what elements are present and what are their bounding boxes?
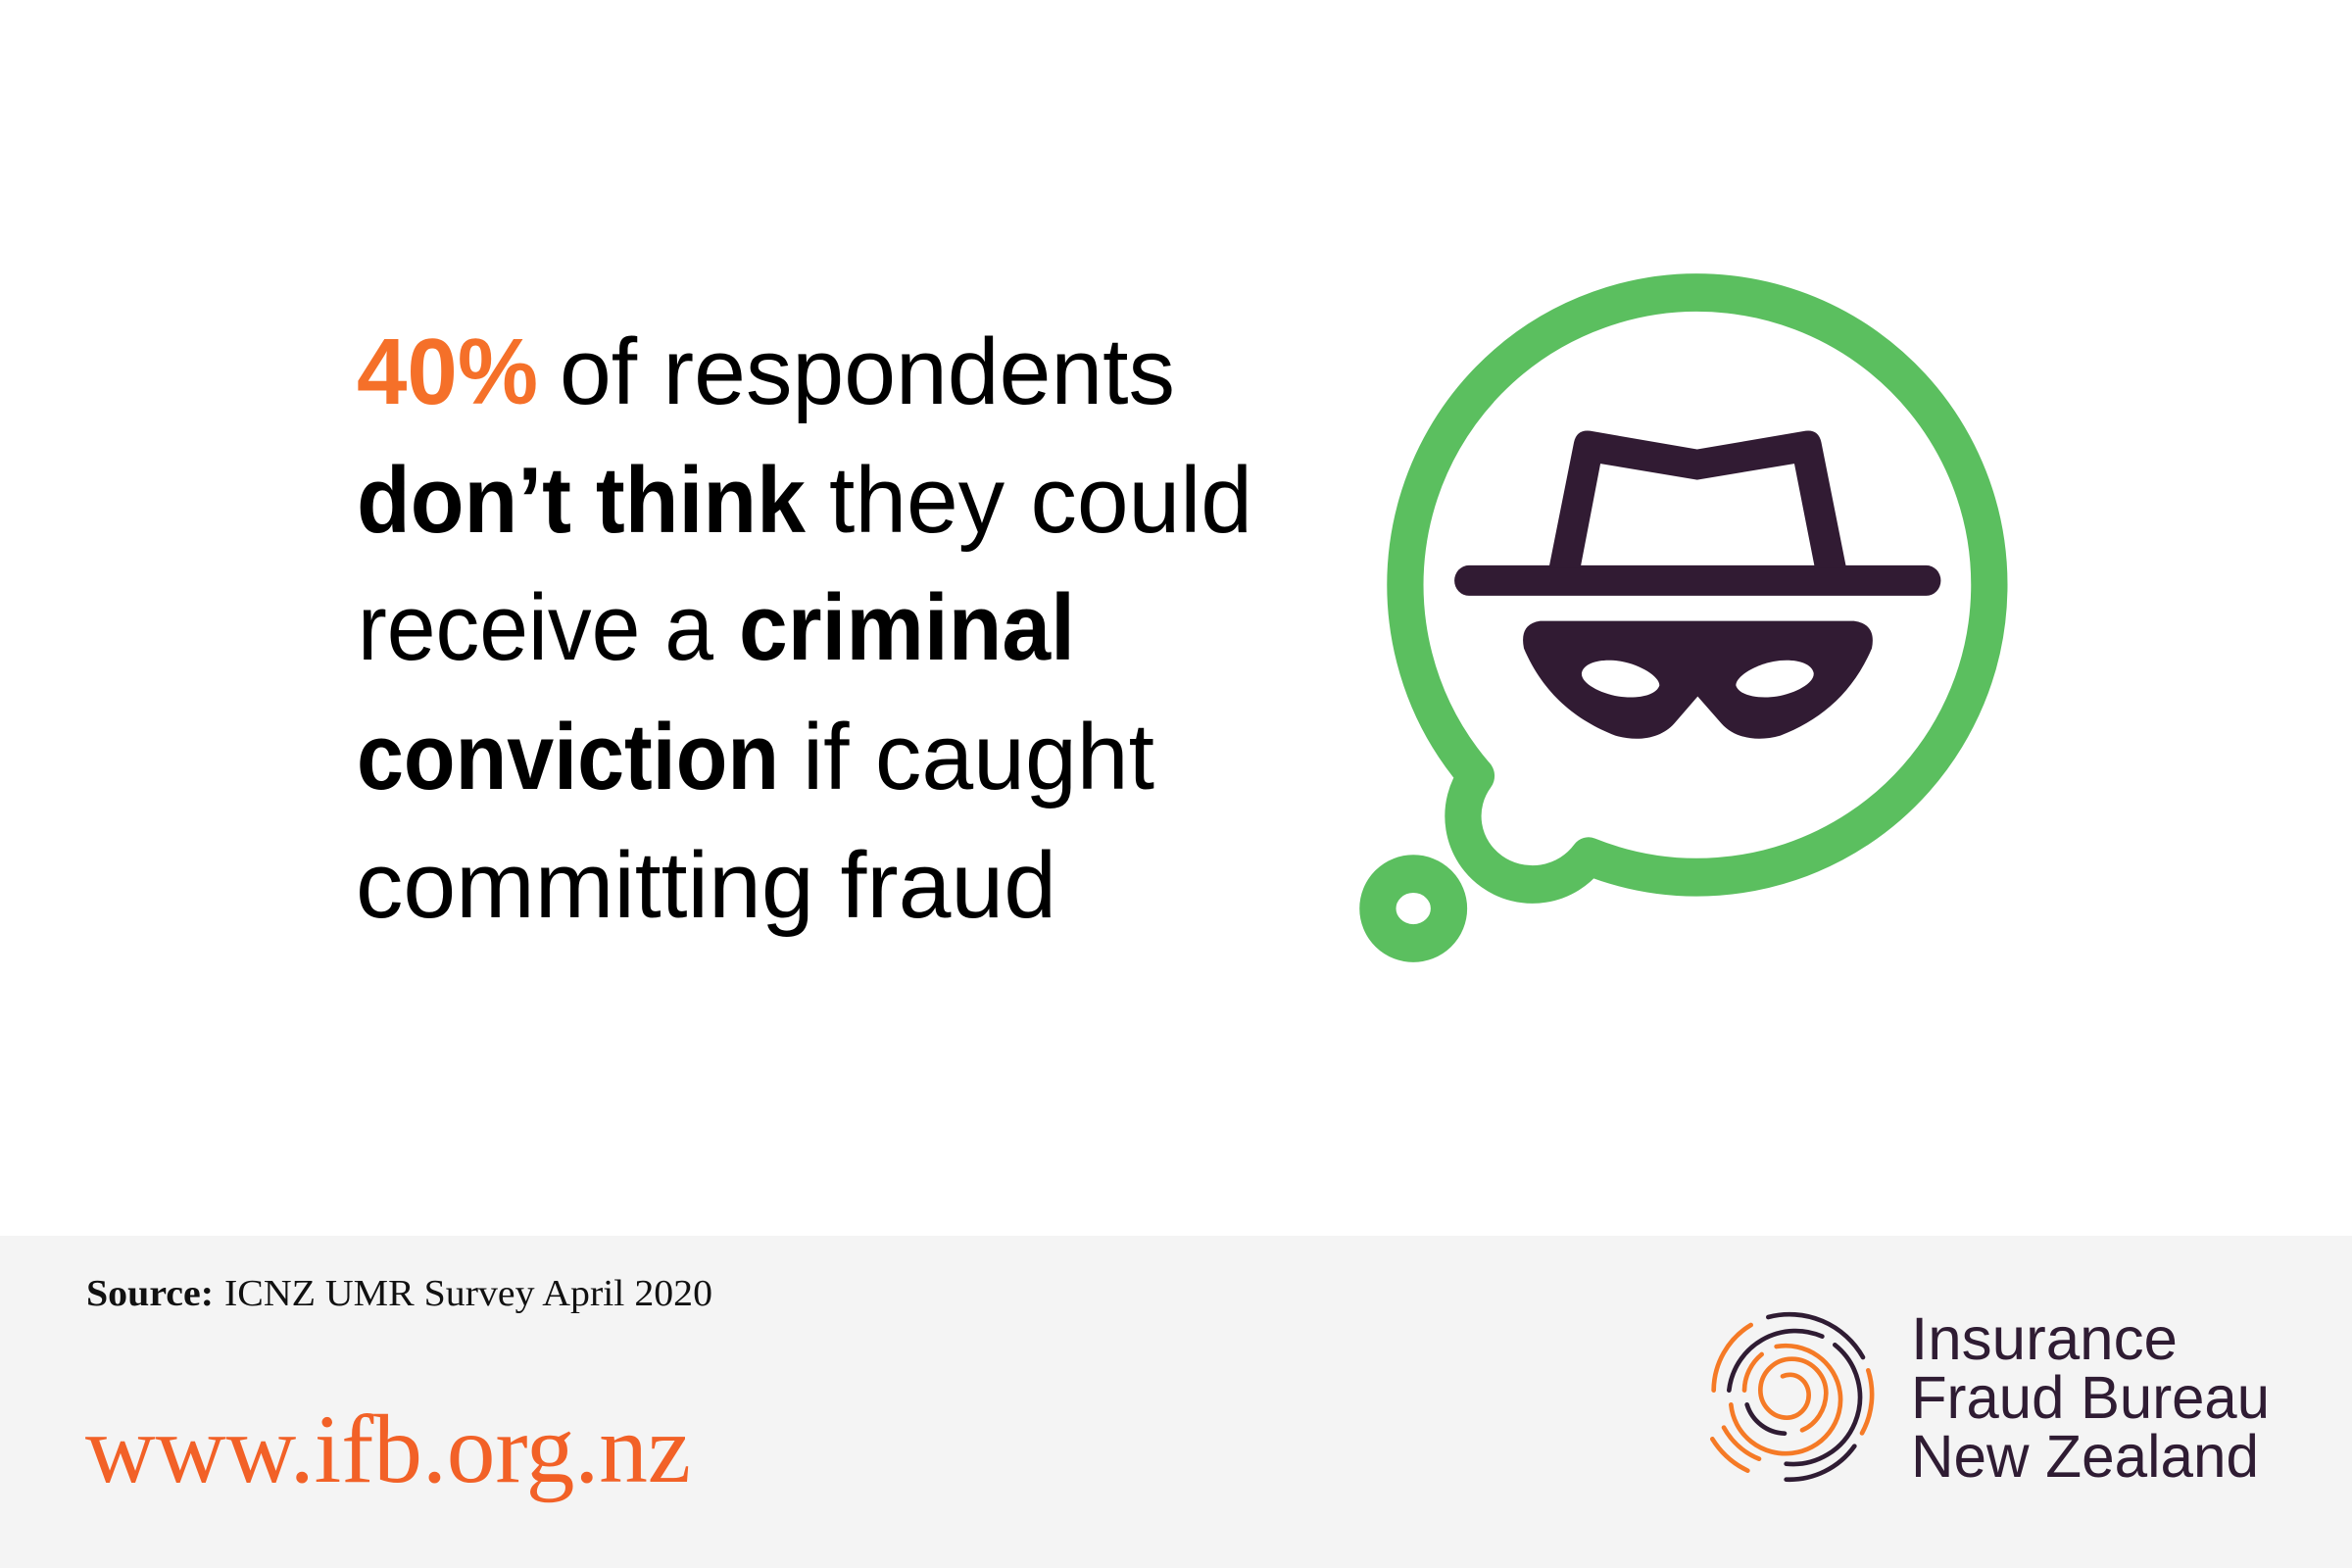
- line 3: receive a criminal: criminal: [739, 575, 1075, 680]
- line 2: don't think they could: [357, 448, 1252, 553]
- source note: ICNZ UMR Survey April 2020: [224, 1273, 712, 1314]
- logo wordmark: [1911, 1305, 2270, 1490]
- line 2: don't think they could: don’t think: [357, 448, 807, 553]
- headline statement: [356, 319, 1252, 938]
- logo wordmark: Insurance: [1911, 1305, 2178, 1372]
- thought bubble outline: [1405, 293, 1989, 884]
- thought bubble outline and hat: [1378, 293, 1989, 943]
- line 5: committing fraud: committing fraud: [356, 833, 1056, 938]
- footer band: [0, 1236, 2352, 1568]
- line 1: 40% of respondents: 40%: [357, 319, 538, 424]
- source note: Source:: [86, 1273, 214, 1314]
- line 3: receive a criminal: receive a: [358, 575, 714, 680]
- logo wordmark: Fraud Bureau: [1911, 1364, 2270, 1431]
- logo wordmark: New Zealand: [1911, 1423, 2259, 1490]
- logo mark: fingerprint spiral: [1712, 1314, 1872, 1480]
- line 4: conviction if caught: if caught: [803, 705, 1154, 809]
- logo: Insurance Fraud Bureau New Zealand: [1712, 1305, 2270, 1490]
- icon: hat: [1454, 430, 1940, 596]
- line 1: 40% of respondents: of respondents: [560, 319, 1175, 424]
- line 3: receive a criminal: [358, 575, 1075, 680]
- line 4: conviction if caught: conviction: [357, 705, 779, 809]
- website url: www.ifb.org.nz: [85, 1395, 691, 1503]
- icon: eye mask: [1523, 621, 1873, 739]
- line 4: conviction if caught: [357, 705, 1154, 809]
- icon: thought bubble with masked figure: [1378, 293, 1989, 943]
- line 2: don't think they could: they could: [829, 448, 1252, 553]
- small thought circle: [1378, 874, 1449, 943]
